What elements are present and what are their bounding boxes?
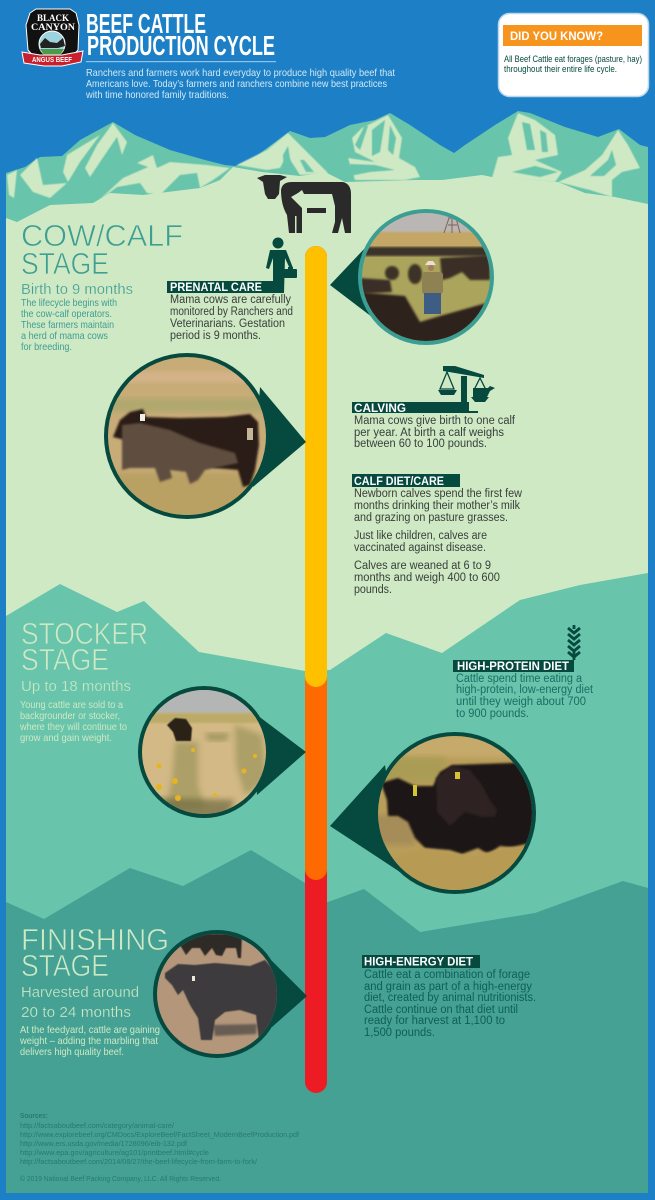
cow/calf stage heading: for breeding.	[21, 341, 72, 353]
timeline bar	[305, 246, 327, 1093]
finishing stage heading: 20 to 24 months	[21, 1004, 131, 1021]
header logo: Black Canyon Angus Beef: ANGUS BEEF	[32, 57, 73, 64]
stage background: stocker	[6, 573, 648, 1000]
intro text	[85, 67, 395, 101]
stocker stage heading: STOCKER	[21, 616, 148, 651]
prenatal care: Mama cows are carefully	[170, 294, 291, 306]
sources	[20, 1111, 300, 1183]
finishing stage heading: delivers high quality beef.	[20, 1046, 124, 1058]
cow/calf stage heading: Birth to 9 months	[21, 281, 133, 298]
sources: http://www.ers.usda.gov/media/1728096/eib-132.pdf	[20, 1139, 188, 1148]
high-energy diet: 1,500 pounds.	[364, 1027, 435, 1039]
calf diet and care: pounds.	[354, 584, 392, 596]
calf diet and care	[352, 474, 523, 596]
stocker stage heading: backgrounder or stocker,	[20, 710, 120, 722]
stocker stage heading: grow and gain weight.	[20, 732, 112, 744]
finishing stage heading: Harvested around	[21, 984, 139, 1001]
calving: between 60 to 100 pounds.	[354, 438, 487, 450]
calving	[352, 402, 516, 450]
cow/calf stage heading: These farmers maintain	[21, 319, 114, 331]
photo callout: rancher with herd	[330, 209, 494, 345]
photo callout: two black cows	[330, 731, 536, 896]
high-energy diet: ready for harvest at 1,100 to	[364, 1015, 505, 1027]
stocker stage heading: Up to 18 months	[21, 678, 131, 695]
calf diet and care: vaccinated against disease.	[354, 542, 486, 554]
finishing stage heading: FINISHING	[21, 922, 169, 957]
intro text: with time honored family traditions.	[85, 89, 229, 101]
high-protein diet	[453, 660, 594, 720]
header logo: Black Canyon Angus Beef: CANYON	[31, 22, 76, 32]
sources: Sources:	[20, 1111, 48, 1120]
stage background: finishing	[6, 850, 648, 1193]
cow/calf stage heading	[21, 218, 183, 353]
high-protein diet: high-protein, low-energy diet	[456, 684, 594, 696]
calf diet and care: and grazing on pasture grasses.	[354, 512, 508, 524]
stocker stage heading	[19, 616, 148, 744]
finishing stage heading: weight – adding the marbling that	[19, 1035, 158, 1047]
high-energy diet: and grain as part of a high-energy	[364, 981, 532, 993]
title	[86, 8, 276, 62]
title: PRODUCTION CYCLE	[87, 30, 275, 61]
high-protein diet: HIGH-PROTEIN DIET	[457, 661, 569, 673]
photo callout: bull in feedyard	[153, 930, 307, 1060]
prenatal care: period is 9 months.	[170, 330, 261, 342]
mountain range	[6, 111, 648, 700]
high-energy diet: Cattle eat a combination of forage	[364, 969, 530, 981]
title: BEEF CATTLE	[86, 8, 206, 39]
calf diet and care: Newborn calves spend the first few	[354, 488, 523, 500]
cow/calf stage heading: STAGE	[21, 246, 109, 281]
did you know box	[498, 14, 648, 96]
cow/calf stage heading: COW/CALF	[21, 218, 183, 253]
calf diet and care: months drinking their mother’s milk	[354, 500, 520, 512]
prenatal care	[167, 281, 293, 342]
calf diet and care: months and weigh 400 to 600	[354, 572, 500, 584]
sources: © 2019 National Beef Packing Company, LLC. All Rights Reserved.	[20, 1174, 221, 1183]
high-energy diet	[362, 955, 536, 1039]
stocker stage heading: STAGE	[21, 642, 109, 677]
high-protein diet: Cattle spend time eating a	[456, 673, 583, 685]
header logo: Black Canyon Angus Beef: BLACK	[37, 13, 69, 23]
sources: http://www.epa.gov/agriculture/ag101/printbeef.html#cycle	[20, 1148, 209, 1157]
finishing stage heading	[19, 922, 169, 1058]
icon: wheat	[568, 625, 580, 660]
photo callout: cow nursing calf	[100, 350, 306, 527]
calf diet and care: CALF DIET/CARE	[354, 476, 444, 488]
did you know box: throughout their entire life cycle.	[504, 64, 617, 75]
stocker stage heading: Young cattle are sold to a	[20, 699, 123, 711]
high-energy diet: Cattle continue on that diet until	[364, 1004, 518, 1016]
prenatal care: monitored by Ranchers and	[170, 306, 293, 318]
cow/calf stage heading: the cow-calf operators.	[21, 308, 112, 320]
intro text: Ranchers and farmers work hard everyday to produce high quality beef that	[86, 67, 395, 79]
prenatal care: Veterinarians. Gestation	[170, 318, 285, 330]
sources: http://factsaboutbeef.com/category/animal-care/	[20, 1121, 175, 1130]
icon: scale with calf	[438, 366, 495, 413]
high-energy diet: HIGH-ENERGY DIET	[364, 956, 473, 968]
header logo: Black Canyon Angus Beef	[22, 9, 83, 66]
stocker stage heading: where they will continue to	[19, 721, 127, 733]
did you know box: DID YOU KNOW?	[510, 31, 603, 43]
calving: Mama cows give birth to one calf	[354, 415, 516, 427]
high-energy diet: diet, created by animal nutritionists.	[364, 992, 536, 1004]
finishing stage heading: At the feedyard, cattle are gaining	[20, 1024, 160, 1036]
finishing stage heading: STAGE	[21, 948, 109, 983]
photo callout: cattle in sunflower field	[138, 685, 306, 820]
sources: http://www.explorebeef.org/CMDocs/ExploreBeef/FactSheet_ModernBeefProduction.pdf	[20, 1130, 300, 1139]
icon: cow and calf	[257, 175, 351, 233]
calving: per year. At birth a calf weighs	[354, 427, 504, 439]
high-protein diet: until they weigh about 700	[456, 696, 586, 708]
icon: veterinarian	[266, 238, 297, 293]
prenatal care: PRENATAL CARE	[170, 282, 262, 294]
high-protein diet: to 900 pounds.	[456, 708, 529, 720]
calving: CALVING	[354, 403, 406, 415]
calf diet and care: Just like children, calves are	[354, 530, 487, 542]
sources: http://factsaboutbeef.com/2014/08/27/the-beef-lifecycle-from-farm-to-fork/	[20, 1157, 258, 1166]
calf diet and care: Calves are weaned at 6 to 9	[354, 560, 491, 572]
cow/calf stage heading: The lifecycle begins with	[21, 297, 117, 309]
cow/calf stage heading: a herd of mama cows	[21, 330, 108, 342]
intro text: Americans love. Today’s farmers and ranchers combine new best practices	[86, 78, 387, 90]
